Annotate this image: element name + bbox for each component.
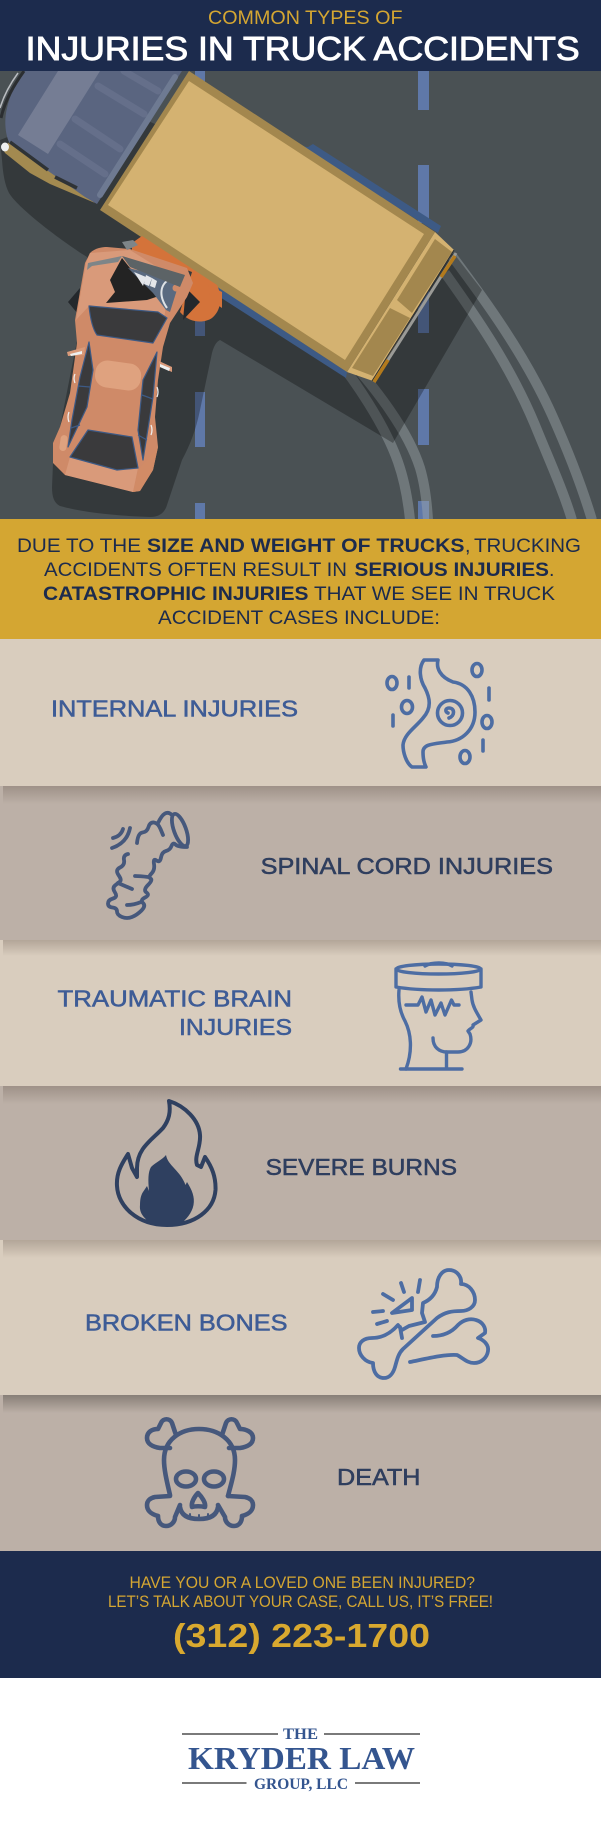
logo: The Kryder Law Group: KRYDER LAW bbox=[188, 1740, 415, 1776]
icon: spine bbox=[108, 812, 191, 918]
intro text: DUE TO THE bbox=[17, 535, 141, 557]
label: INTERNAL INJURIES bbox=[51, 696, 298, 722]
icon: flame bbox=[117, 1101, 216, 1226]
orange car bbox=[53, 236, 222, 492]
row: broken bones bbox=[0, 1240, 601, 1395]
intro text: SIZE AND WEIGHT OF TRUCKS bbox=[147, 535, 464, 557]
row: traumatic brain injuries bbox=[0, 940, 601, 1086]
intro text bbox=[17, 535, 581, 629]
label bbox=[58, 986, 292, 1040]
intro panel bbox=[0, 519, 601, 639]
road lane dashes bbox=[195, 71, 429, 519]
intro text: ACCIDENTS OFTEN RESULT IN bbox=[44, 559, 347, 581]
row: internal injuries bbox=[0, 639, 601, 786]
truck cargo box bbox=[100, 71, 456, 382]
illustration: truck accident scene bbox=[0, 71, 601, 520]
row: severe burns bbox=[0, 1086, 601, 1240]
title banner bbox=[0, 0, 601, 71]
main title: INJURIES IN TRUCK ACCIDENTS bbox=[26, 30, 580, 67]
intro text: ACCIDENT CASES INCLUDE: bbox=[158, 607, 440, 629]
icon: head with brain wave bbox=[396, 963, 481, 1069]
invitation text: LET’S TALK ABOUT YOUR CASE, CALL US, IT’S FREE! bbox=[108, 1593, 493, 1611]
intro text: . bbox=[549, 559, 554, 581]
icon: stomach bbox=[387, 660, 492, 767]
shadows bbox=[0, 100, 482, 517]
label: DEATH bbox=[337, 1464, 420, 1490]
logo: The Kryder Law Group: THE bbox=[283, 1726, 318, 1743]
phone number: (312) 223-1700 bbox=[173, 1617, 430, 1654]
icon: skull and crossbones bbox=[147, 1419, 253, 1526]
intro text: CATASTROPHIC INJURIES bbox=[43, 583, 308, 605]
row: death bbox=[0, 1395, 601, 1551]
row: spinal cord injuries bbox=[0, 786, 601, 940]
truck cab bbox=[0, 71, 182, 204]
label: SPINAL CORD INJURIES bbox=[261, 853, 553, 879]
intro text: , bbox=[465, 535, 470, 557]
label: INJURIES bbox=[179, 1014, 292, 1040]
label: SEVERE BURNS bbox=[266, 1154, 457, 1180]
logo: The Kryder Law Group bbox=[182, 1726, 420, 1793]
tire tracks bbox=[330, 256, 592, 520]
label: TRAUMATIC BRAIN bbox=[58, 986, 292, 1012]
intro text: THAT WE SEE IN TRUCK bbox=[314, 583, 555, 605]
logo: The Kryder Law Group: GROUP, LLC bbox=[254, 1776, 348, 1793]
intro text: SERIOUS INJURIES bbox=[354, 559, 549, 581]
icon: broken bones bbox=[359, 1270, 488, 1378]
call to action footer bbox=[0, 1551, 601, 1678]
intro text: TRUCKING bbox=[474, 535, 581, 557]
title kicker: COMMON TYPES OF bbox=[208, 7, 403, 29]
question text: HAVE YOU OR A LOVED ONE BEEN INJURED? bbox=[130, 1574, 475, 1592]
label: BROKEN BONES bbox=[85, 1310, 288, 1336]
